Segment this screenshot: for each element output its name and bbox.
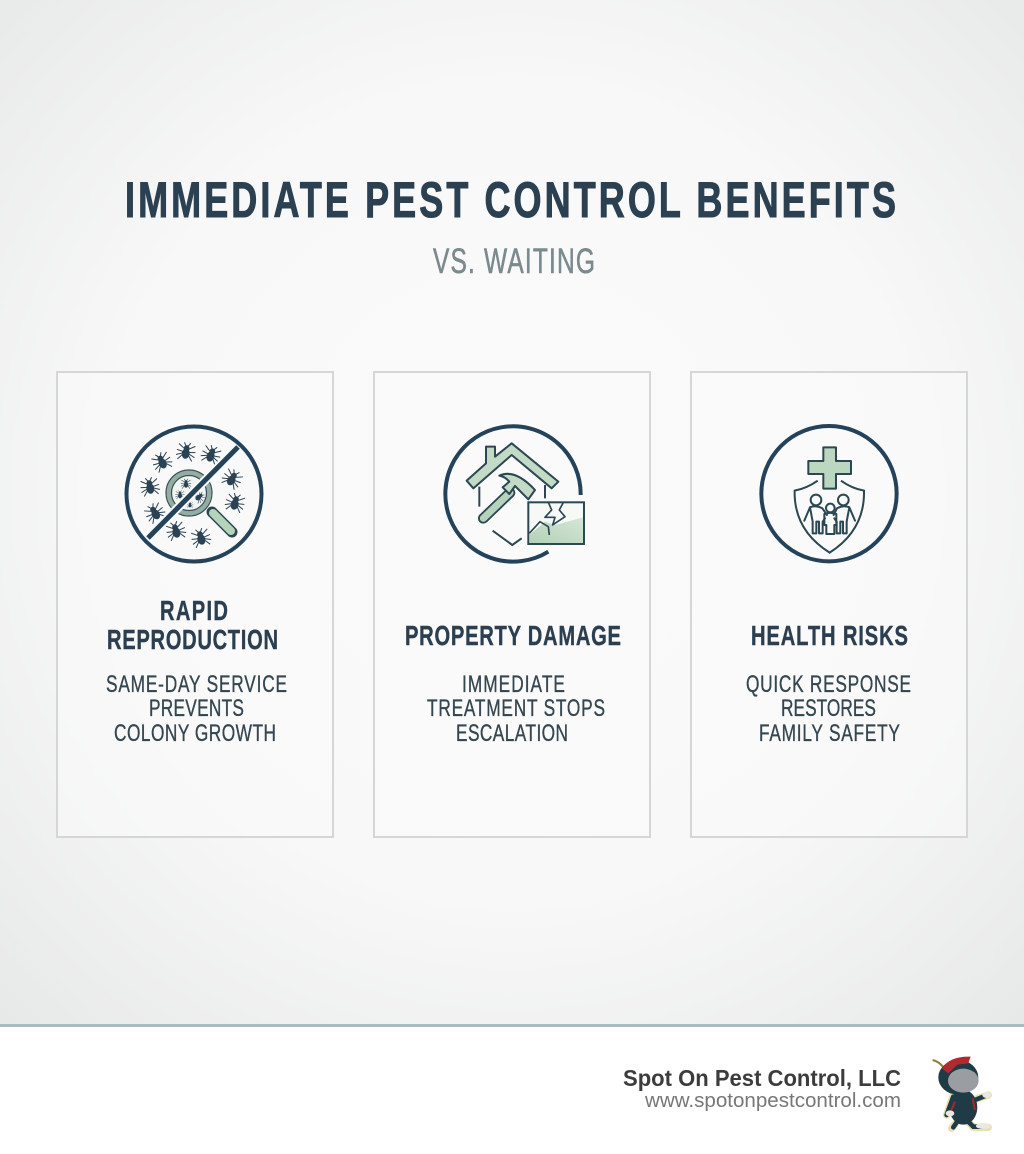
company name: Spot On Pest Control, LLC (623, 1065, 901, 1091)
description (746, 671, 911, 747)
title: IMMEDIATE PEST CONTROL BENEFITS (125, 173, 896, 228)
website: www.spotonpestcontrol.com (644, 1090, 901, 1112)
description: ESCALATION (456, 720, 568, 747)
description: SAME-DAY SERVICE (106, 671, 287, 698)
heading: HEALTH RISKS (751, 621, 908, 652)
heading (107, 596, 278, 656)
description: RESTORES (781, 695, 876, 722)
subtitle: VS. WAITING (433, 243, 595, 281)
description: FAMILY SAFETY (759, 720, 900, 747)
icon: family shield (761, 426, 897, 561)
description: TREATMENT STOPS (427, 695, 605, 722)
panel: rapid reproduction (57, 372, 333, 837)
footer (0, 1024, 1024, 1154)
description (106, 671, 287, 747)
icon: no bugs magnifier (126, 426, 262, 562)
panel: property damage (374, 372, 650, 837)
description (427, 671, 605, 747)
heading: REPRODUCTION (107, 625, 278, 656)
description: COLONY GROWTH (114, 720, 276, 747)
icon: damaged house (445, 426, 584, 562)
description: QUICK RESPONSE (746, 671, 911, 698)
icon: mascot (933, 1057, 991, 1129)
heading: RAPID (160, 596, 228, 627)
panel: health risks (691, 372, 967, 837)
description: PREVENTS (149, 695, 244, 722)
heading: PROPERTY DAMAGE (405, 621, 621, 652)
description: IMMEDIATE (462, 671, 565, 698)
